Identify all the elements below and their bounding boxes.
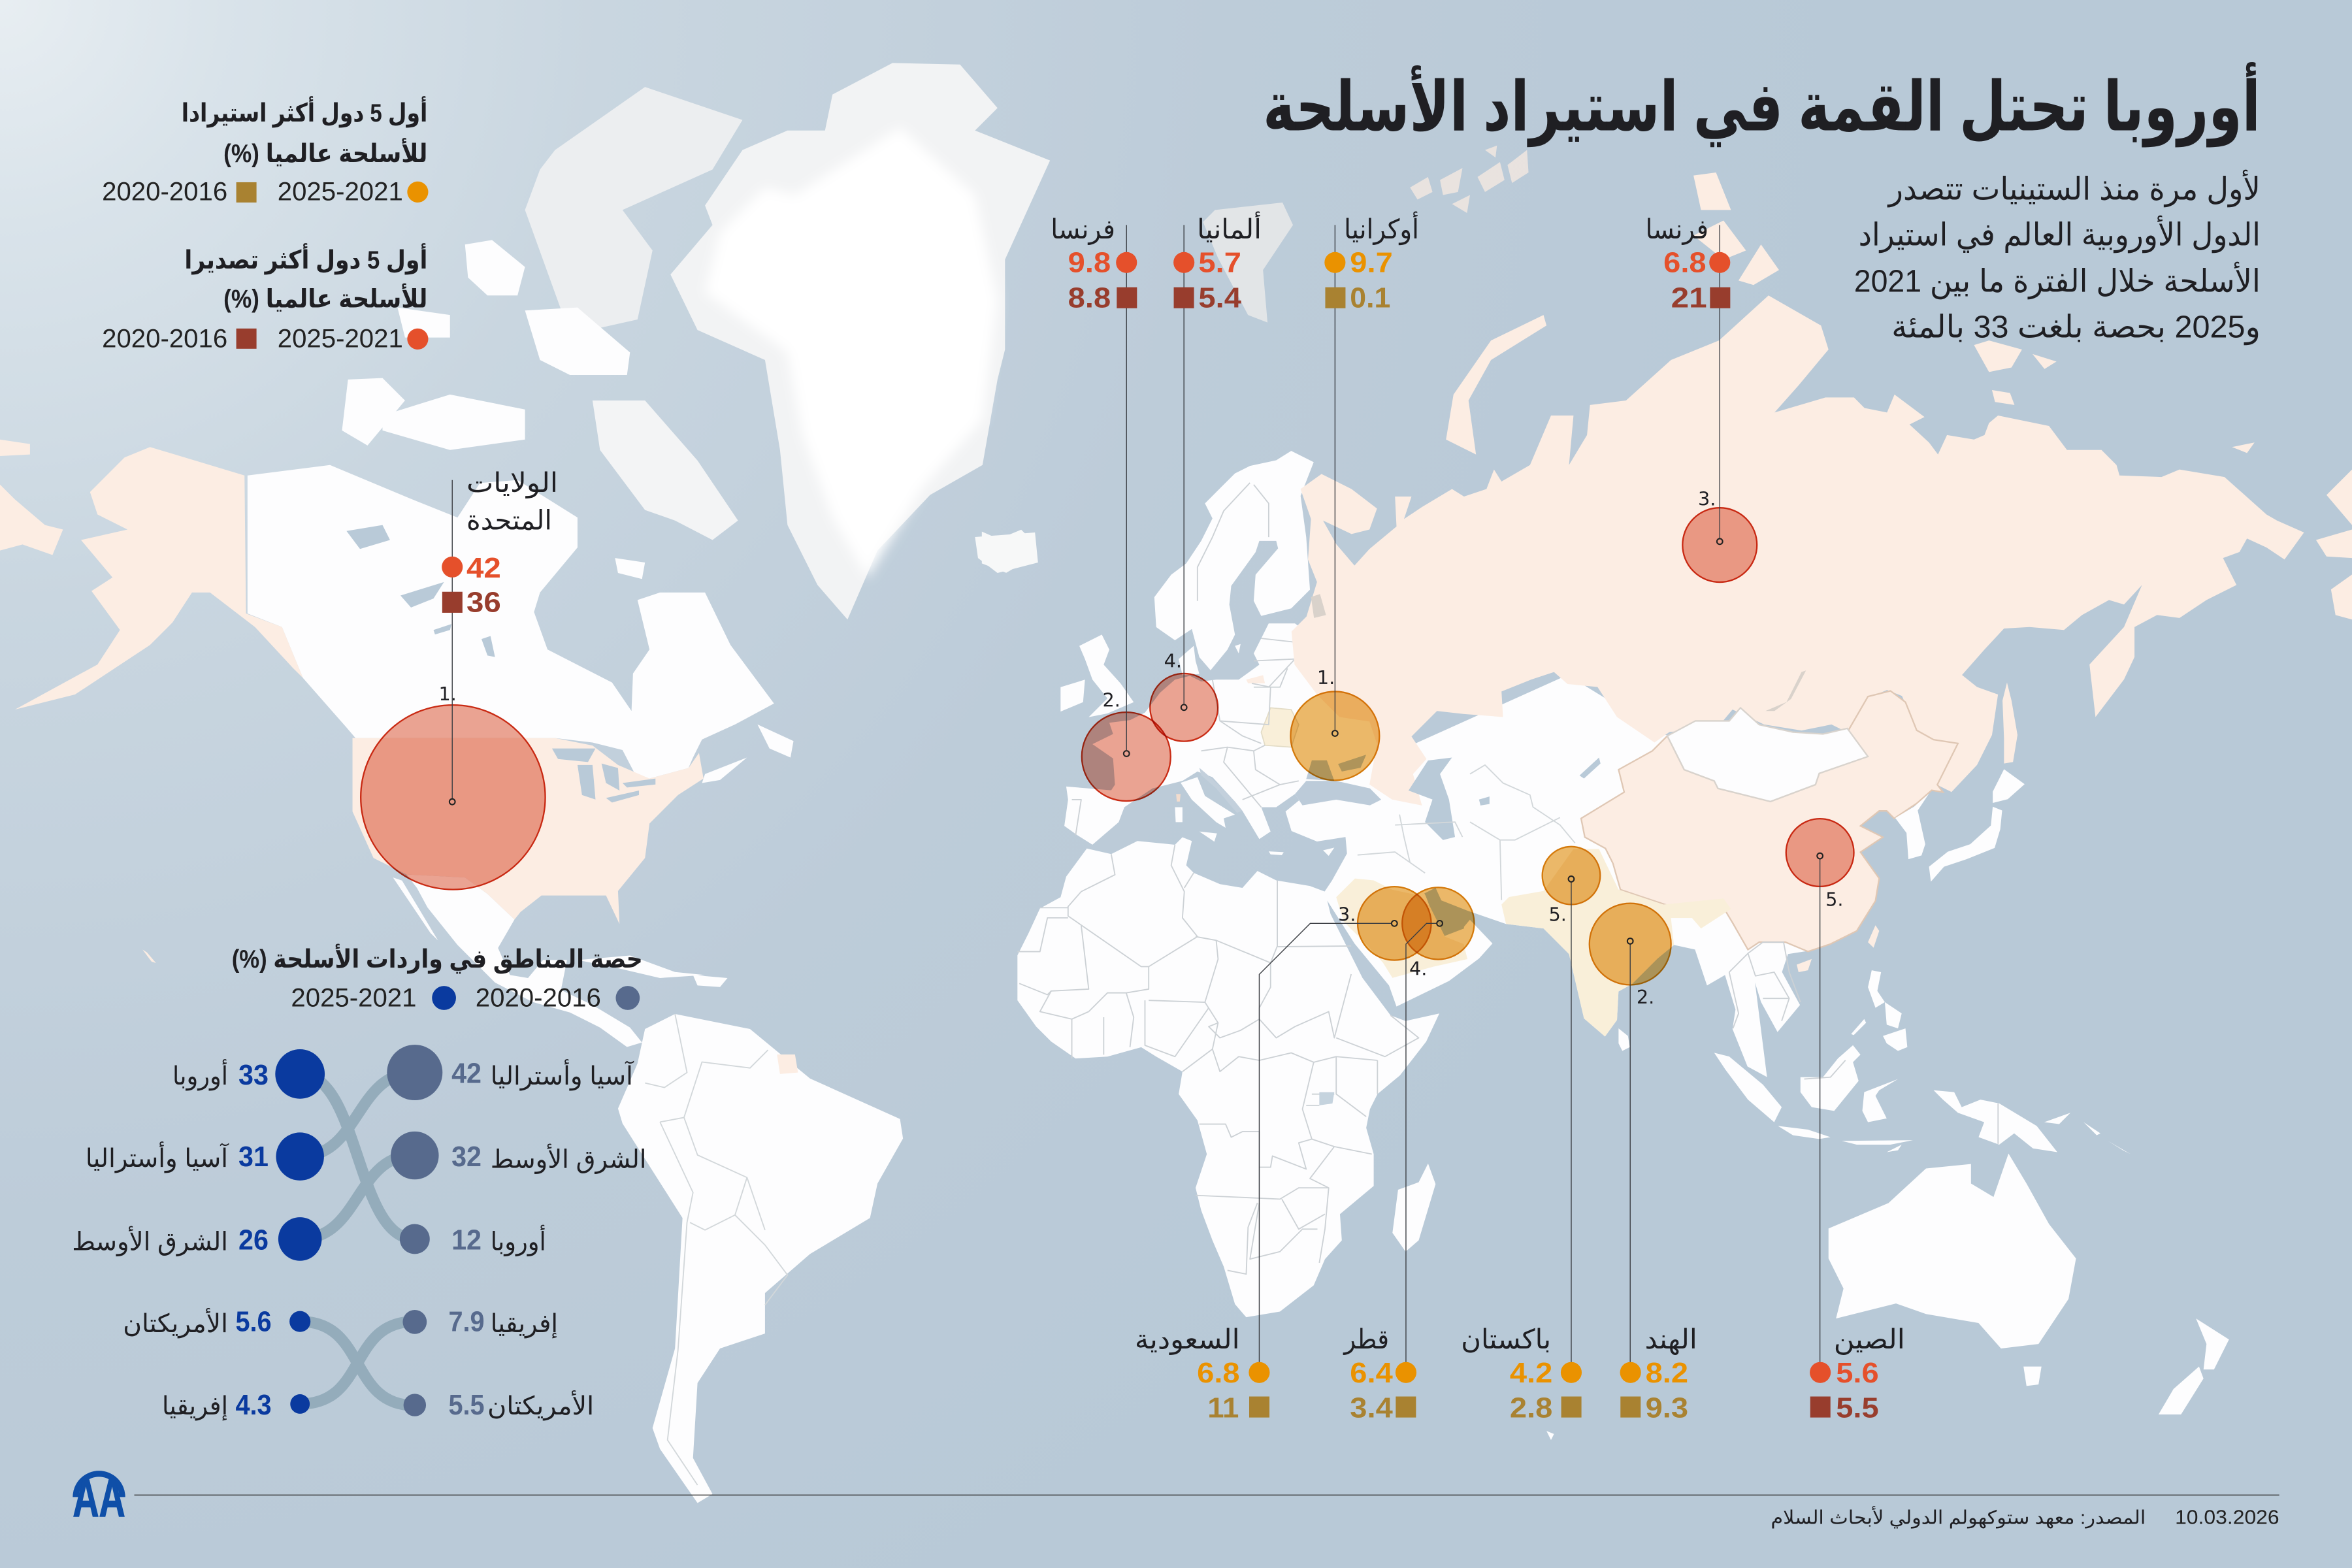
bubble: china <box>1786 819 1854 887</box>
slope connectors <box>300 1073 415 1405</box>
labels 2020-2016: 12 <box>451 1225 482 1256</box>
circles 2020-2016 <box>387 1045 442 1416</box>
labels 2020-2016: أوروبا <box>491 1225 546 1257</box>
labels 2025-2021: إفريقيا <box>162 1392 228 1421</box>
rank numbers: 1. <box>439 683 457 705</box>
callout: france exports: 8.8 <box>1068 283 1111 314</box>
subtitle text block: الأسلحة خلال الفترة ما بين 2021 <box>1854 261 2261 300</box>
labels 2020-2016: 32 <box>451 1141 482 1173</box>
panel legend <box>291 983 640 1013</box>
callout: germany exports: 5.7 <box>1198 248 1241 279</box>
labels 2025-2021: 5.6 <box>235 1307 272 1338</box>
labels 2025-2021: 31 <box>238 1141 269 1173</box>
legend: top importers: 2025-2021 <box>278 177 403 206</box>
callout: france exports <box>1051 214 1137 757</box>
labels 2025-2021: 4.3 <box>235 1390 272 1421</box>
labels 2025-2021: 33 <box>238 1060 269 1091</box>
legend: top importers <box>102 96 428 206</box>
callout: russia exports: فرنسا <box>1646 214 1708 245</box>
bubble: germany <box>1150 674 1218 742</box>
rank numbers: 4. <box>1409 957 1427 979</box>
legend: top exporters: 2025-2021 <box>278 324 403 353</box>
logo: AA: AA <box>73 1467 125 1528</box>
subtitle text block: لأول مرة منذ الستينيات تتصدر <box>1887 169 2261 207</box>
map: australia and new zealand <box>1546 1154 2229 1440</box>
callout: pakistan imports <box>1461 876 1582 1424</box>
legend: top exporters <box>102 243 428 353</box>
callout: qatar imports: قطر <box>1343 1324 1389 1355</box>
callout: united states exports: الولايات <box>466 468 558 498</box>
callout: ukraine imports: 9.7 <box>1350 248 1393 279</box>
map: japan and korea <box>1895 769 2025 882</box>
callout: pakistan imports: 4.2 <box>1510 1358 1552 1389</box>
labels 2025-2021: الشرق الأوسط <box>72 1226 228 1257</box>
callout: india imports: 9.3 <box>1646 1393 1688 1424</box>
map: svalbard <box>1203 203 1293 323</box>
callout: china exports: 5.6 <box>1836 1358 1879 1389</box>
callout: india imports <box>1620 938 1697 1424</box>
callout: russia exports: 6.8 <box>1663 248 1707 279</box>
labels 2025-2021: آسيا وأستراليا <box>86 1141 229 1173</box>
callout: india imports: الهند <box>1644 1324 1697 1355</box>
labels 2020-2016: الأمريكتان <box>487 1390 594 1421</box>
legend: top exporters: 2020-2016 <box>102 324 227 353</box>
map: lakes <box>1311 594 1806 711</box>
map: north america <box>0 63 1050 1047</box>
callout: france exports: 9.8 <box>1068 248 1111 279</box>
rank numbers: 5. <box>1549 904 1567 926</box>
bubble: france <box>1082 712 1171 801</box>
rank numbers: 3. <box>1338 904 1356 926</box>
callout: saudi arabia imports: 11 <box>1207 1393 1239 1424</box>
map: russia <box>1292 295 2304 806</box>
labels 2025-2021: الأمريكتان <box>123 1307 228 1339</box>
panel heading: حصة المناطق في واردات الأسلحة (%) <box>232 943 643 974</box>
bubble: united states <box>361 705 546 889</box>
bubbles: importers and exporters <box>361 508 1854 985</box>
map: south asia and arabia <box>1336 757 1731 1036</box>
rank numbers: 2. <box>1103 689 1120 711</box>
callout: pakistan imports: 2.8 <box>1510 1393 1552 1424</box>
callout: china exports: 5.5 <box>1836 1393 1879 1424</box>
callout: china exports: الصين <box>1834 1324 1905 1355</box>
rank numbers: 4. <box>1164 650 1182 672</box>
callout: russia exports <box>1646 214 1730 544</box>
callout: united states exports: 36 <box>466 587 501 619</box>
map: russian islands <box>1410 146 2352 764</box>
callout: germany exports: 5.4 <box>1198 283 1242 314</box>
subtitle text block: الدول الأوروبية العالم في استيراد <box>1859 214 2261 253</box>
callout: qatar imports: 3.4 <box>1350 1393 1394 1424</box>
bubble: pakistan <box>1543 847 1600 904</box>
panel: regional share of arms imports <box>72 943 647 1421</box>
callout: russia exports: 21 <box>1671 283 1707 314</box>
callout: saudi arabia imports: 6.8 <box>1197 1358 1240 1389</box>
labels 2020-2016: إفريقيا <box>491 1310 558 1339</box>
callout: saudi arabia imports <box>1135 921 1397 1424</box>
rank numbers: 3. <box>1698 488 1716 510</box>
labels 2025-2021: 26 <box>238 1225 269 1256</box>
legend: top importers: 2020-2016 <box>102 177 227 206</box>
callout: ukraine imports <box>1324 211 1419 736</box>
footer: 10.03.2026 <box>2175 1506 2279 1529</box>
map: south america <box>618 1014 903 1503</box>
callout: india imports: 8.2 <box>1646 1358 1688 1389</box>
callout: ukraine imports: 0.1 <box>1350 283 1390 314</box>
labels 2020-2016: الشرق الأوسط <box>491 1143 647 1174</box>
logo: AA <box>73 1467 125 1528</box>
subtitle text block <box>1854 169 2261 346</box>
bubble: russia <box>1682 508 1757 582</box>
rank numbers <box>439 488 1844 1008</box>
callout: qatar imports: 6.4 <box>1350 1358 1394 1389</box>
circles 2025-2021 <box>275 1049 325 1414</box>
map: africa <box>1017 837 1439 1317</box>
footer: المصدر: معهد ستوكهولم الدولي لأبحاث السلام <box>1771 1505 2146 1529</box>
callout: ukraine imports: أوكرانيا <box>1344 211 1419 245</box>
panel legend: 2025-2021 <box>291 983 416 1013</box>
callout: united states exports: 42 <box>466 553 501 584</box>
bubble: qatar <box>1402 887 1474 959</box>
bubble: ukraine <box>1290 691 1379 780</box>
labels 2020-2016: 7.9 <box>448 1307 485 1338</box>
panel legend: 2020-2016 <box>476 983 601 1013</box>
callout: united states exports: المتحدة <box>466 505 552 535</box>
rank numbers: 2. <box>1637 986 1654 1008</box>
labels 2025-2021 <box>72 1059 272 1421</box>
legend: top importers: للأسلحة عالميا (%) <box>223 137 427 168</box>
labels 2020-2016: 5.5 <box>448 1390 485 1421</box>
callout: qatar imports <box>1343 921 1443 1424</box>
legend: top importers: أول 5 دول أكثر استيرادا <box>182 96 427 128</box>
callout: china exports <box>1810 853 1905 1424</box>
labels 2020-2016: 42 <box>451 1058 482 1090</box>
callout: germany exports: ألمانيا <box>1197 211 1262 244</box>
labels 2020-2016 <box>448 1058 647 1421</box>
map: asia underlay <box>1286 675 1860 1077</box>
map: east asia <box>1581 691 2131 1154</box>
legend: top exporters: أول 5 دول أكثر تصديرا <box>184 243 427 275</box>
legend: top exporters: للأسلحة عالميا (%) <box>223 283 427 314</box>
callout: united states exports <box>442 468 558 805</box>
rank numbers: 1. <box>1317 666 1335 689</box>
callout: saudi arabia imports: السعودية <box>1135 1324 1240 1355</box>
subtitle text block: و2025 بحصة بلغت 33 بالمئة <box>1891 310 2261 346</box>
callout: germany exports <box>1173 211 1262 710</box>
rank numbers: 5. <box>1825 889 1844 911</box>
bubble: saudi arabia <box>1358 887 1431 960</box>
bubble: india <box>1590 904 1671 985</box>
callout: france exports: فرنسا <box>1051 214 1115 245</box>
footer <box>134 1495 2279 1529</box>
labels 2025-2021: أوروبا <box>172 1059 228 1091</box>
callout: pakistan imports: باكستان <box>1461 1324 1551 1354</box>
map: europe <box>982 451 1418 856</box>
labels 2020-2016: آسيا وأستراليا <box>491 1059 634 1091</box>
